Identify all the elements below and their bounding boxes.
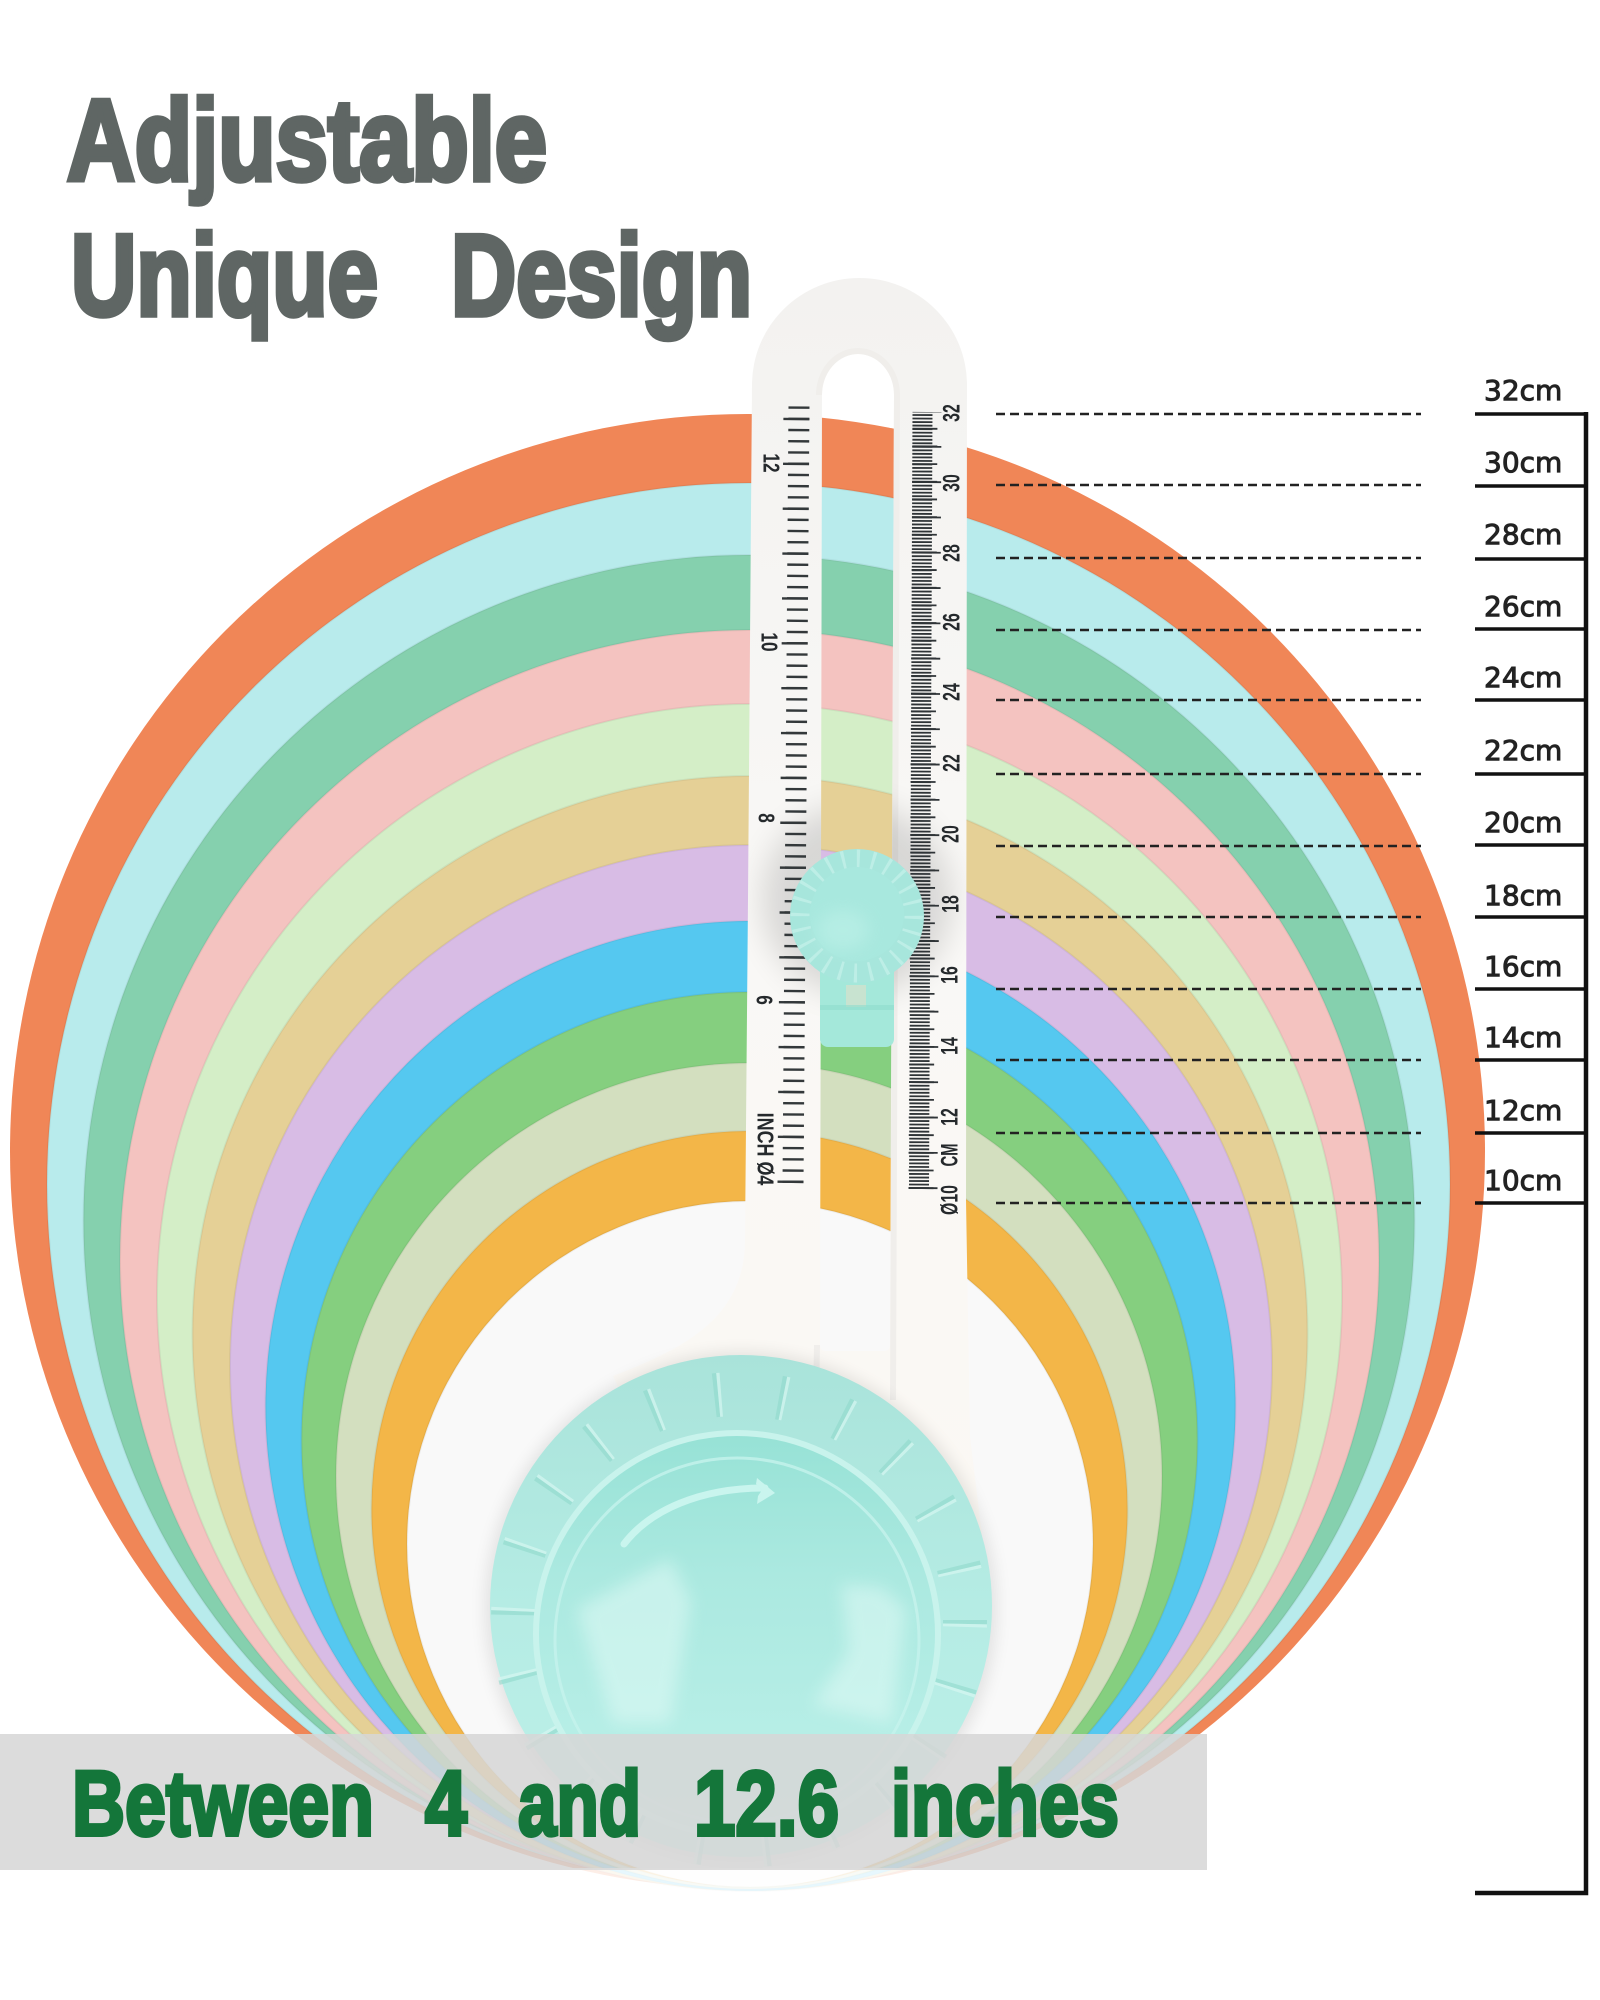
- circle cutter ruler arm: [745, 278, 968, 1400]
- centimetre scale numbers: 26: [940, 613, 966, 631]
- size labels: 28cm: [1484, 518, 1562, 551]
- size labels: 32cm: [1484, 374, 1562, 407]
- centimetre scale numbers: 16: [938, 966, 964, 984]
- size labels: 26cm: [1484, 590, 1562, 623]
- inch scale numbers: 6: [751, 995, 776, 1005]
- size labels: 12cm: [1484, 1094, 1562, 1127]
- caption text: [72, 1753, 1119, 1855]
- centimetre scale numbers: 18: [939, 895, 965, 913]
- title: Unique: [71, 212, 378, 340]
- concentric coloured circles: [10, 414, 1485, 1891]
- caption text: inches: [891, 1753, 1119, 1855]
- caption text: 12.6: [694, 1753, 839, 1855]
- centimetre scale numbers: 22: [940, 754, 966, 772]
- inch scale numbers: INCH Ø4: [752, 1113, 778, 1186]
- caption band: [0, 1734, 1207, 1870]
- centimetre scale numbers: 28: [940, 544, 966, 562]
- inch scale numbers: 8: [753, 813, 778, 823]
- size labels: 10cm: [1484, 1164, 1562, 1197]
- inch scale numbers: 12: [758, 453, 783, 473]
- fade below the band: [0, 1868, 1400, 1908]
- centimetre scale numbers: 12: [938, 1108, 964, 1126]
- centimetre scale numbers: 14: [938, 1037, 964, 1055]
- icon: rotation arrow: [624, 1478, 775, 1544]
- caption text: and: [518, 1753, 641, 1855]
- size scale bracket: [1475, 374, 1586, 1893]
- icon: sliding blade knob: [790, 849, 924, 1047]
- inch scale numbers: [751, 453, 783, 1186]
- caption text: Between: [72, 1753, 374, 1855]
- centimetre scale ticks: [919, 412, 927, 1189]
- size labels: 20cm: [1484, 806, 1562, 839]
- inch scale numbers: 10: [756, 632, 781, 652]
- inch scale ticks: [790, 405, 799, 1183]
- title: Design: [451, 212, 752, 340]
- centimetre scale numbers: 20: [939, 825, 965, 843]
- centimetre scale numbers: [937, 404, 966, 1215]
- centimetre scale numbers: 32: [940, 404, 966, 422]
- size labels: [1484, 374, 1562, 1197]
- centimetre scale numbers: 30: [940, 474, 966, 492]
- size labels: 30cm: [1484, 446, 1562, 479]
- centimetre scale numbers: Ø10: [938, 1185, 964, 1215]
- caption text: 4: [425, 1753, 467, 1855]
- dial glare highlights: [577, 1559, 906, 1723]
- size labels: 18cm: [1484, 879, 1562, 912]
- size labels: 24cm: [1484, 661, 1562, 694]
- size labels: 22cm: [1484, 734, 1562, 767]
- size labels: 14cm: [1484, 1021, 1562, 1054]
- icon: large turquoise dial: [485, 1352, 997, 1864]
- centimetre scale numbers: CM: [937, 1143, 964, 1167]
- title: Adjustable: [67, 77, 547, 205]
- centimetre scale numbers: 24: [940, 683, 966, 701]
- size labels: 16cm: [1484, 950, 1562, 983]
- title: [67, 77, 752, 340]
- dashed measure leaders: [996, 414, 1421, 1203]
